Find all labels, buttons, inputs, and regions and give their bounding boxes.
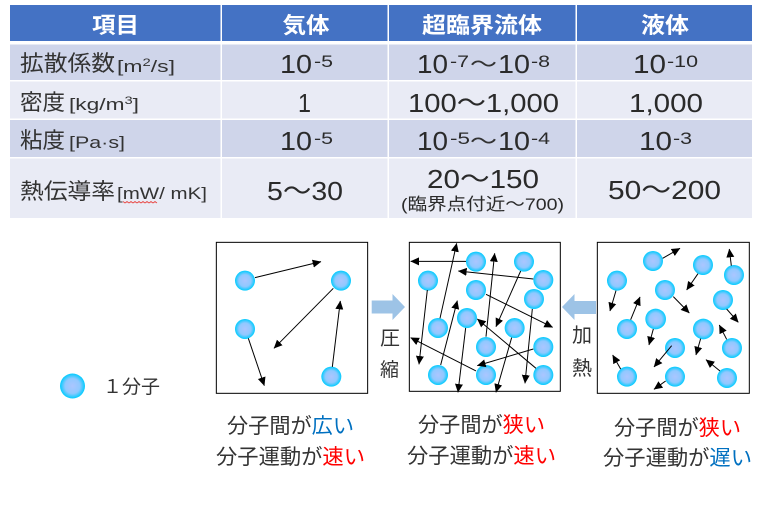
table header row: 液体 — [641, 8, 689, 40]
diagram: liquid — [597, 242, 749, 393]
caption: liquid: 分子間が狭い — [614, 412, 741, 442]
arrow: compression: 縮 — [380, 355, 399, 382]
row: viscosity: 10 — [280, 126, 312, 156]
row: diffusion coefficient: 10 — [498, 49, 530, 79]
row: density: ] — [133, 95, 139, 114]
arrow: heating: 加 — [572, 319, 592, 348]
row: viscosity: ～ — [470, 124, 497, 156]
arrow: heating: 熱 — [572, 352, 592, 381]
row: density — [10, 82, 752, 118]
comparison table — [10, 5, 752, 218]
row: thermal conductivity: 5～30 — [267, 176, 343, 206]
row: viscosity: 10 — [417, 126, 448, 156]
row: viscosity: 粘度 — [20, 123, 65, 155]
row: diffusion coefficient: -7 — [450, 52, 469, 71]
row: thermal conductivity — [10, 158, 752, 218]
row: thermal conductivity: 20～150 — [427, 164, 539, 194]
row: diffusion coefficient — [10, 44, 752, 80]
row: viscosity: 10 — [639, 126, 672, 156]
row: thermal conductivity: [mW/ mK] — [117, 184, 207, 203]
row: diffusion coefficient: 10 — [633, 49, 666, 79]
row: density: [kg/m — [69, 95, 111, 114]
row: viscosity: -3 — [673, 129, 692, 148]
arrow: compression — [372, 294, 405, 382]
diagram: supercritical fluid — [409, 242, 560, 392]
arrow: heating — [562, 294, 596, 381]
row: diffusion coefficient: 拡散係数 — [20, 46, 115, 78]
caption: supercritical fluid — [407, 409, 556, 470]
row: viscosity: 10 — [498, 126, 530, 156]
row: thermal conductivity: 50～200 — [608, 175, 721, 205]
caption: liquid — [603, 412, 752, 472]
caption: gas: 分子間が広い — [227, 410, 354, 440]
row: viscosity: [Pa·s] — [69, 133, 125, 152]
row: diffusion coefficient: -10 — [667, 52, 698, 71]
row: diffusion coefficient: 10 — [417, 49, 448, 79]
row: diffusion coefficient: 2 — [142, 57, 151, 69]
row: viscosity — [10, 120, 752, 157]
row: viscosity: -5 — [314, 129, 333, 148]
table header row: 超臨界流体 — [422, 8, 542, 40]
row: diffusion coefficient: -5 — [314, 52, 333, 71]
row: diffusion coefficient: -8 — [531, 52, 550, 71]
caption: supercritical fluid: 分子間が狭い — [418, 409, 545, 439]
row: thermal conductivity: (臨界点付近～700) — [401, 195, 564, 214]
caption: gas — [216, 410, 365, 471]
row: diffusion coefficient: ～ — [470, 47, 497, 79]
row: density: 密度 — [20, 85, 65, 117]
legend: one molecule — [60, 372, 160, 399]
row: viscosity: -4 — [531, 129, 550, 148]
table header row: 項目 — [92, 8, 139, 40]
row: thermal conductivity: 熱伝導率 — [20, 174, 115, 206]
legend: one molecule: １分子 — [103, 372, 160, 399]
arrow: compression: 圧 — [380, 322, 400, 351]
caption: gas: 分子運動が速い — [216, 441, 365, 471]
row: diffusion coefficient: [m — [117, 57, 136, 76]
row: viscosity: -5 — [450, 129, 470, 148]
table header row — [10, 5, 752, 41]
diagram: gas — [216, 242, 368, 393]
row: density: 100～1,000 — [408, 88, 559, 118]
caption: supercritical fluid: 分子運動が速い — [407, 440, 556, 470]
row: density: 3 — [124, 95, 133, 107]
row: diffusion coefficient: /s] — [151, 57, 175, 76]
row: density: 1,000 — [629, 88, 703, 118]
row: diffusion coefficient: 10 — [280, 49, 312, 79]
table header row: 気体 — [282, 8, 330, 40]
caption: liquid: 分子運動が遅い — [603, 442, 752, 472]
row: density: 1 — [298, 88, 311, 118]
